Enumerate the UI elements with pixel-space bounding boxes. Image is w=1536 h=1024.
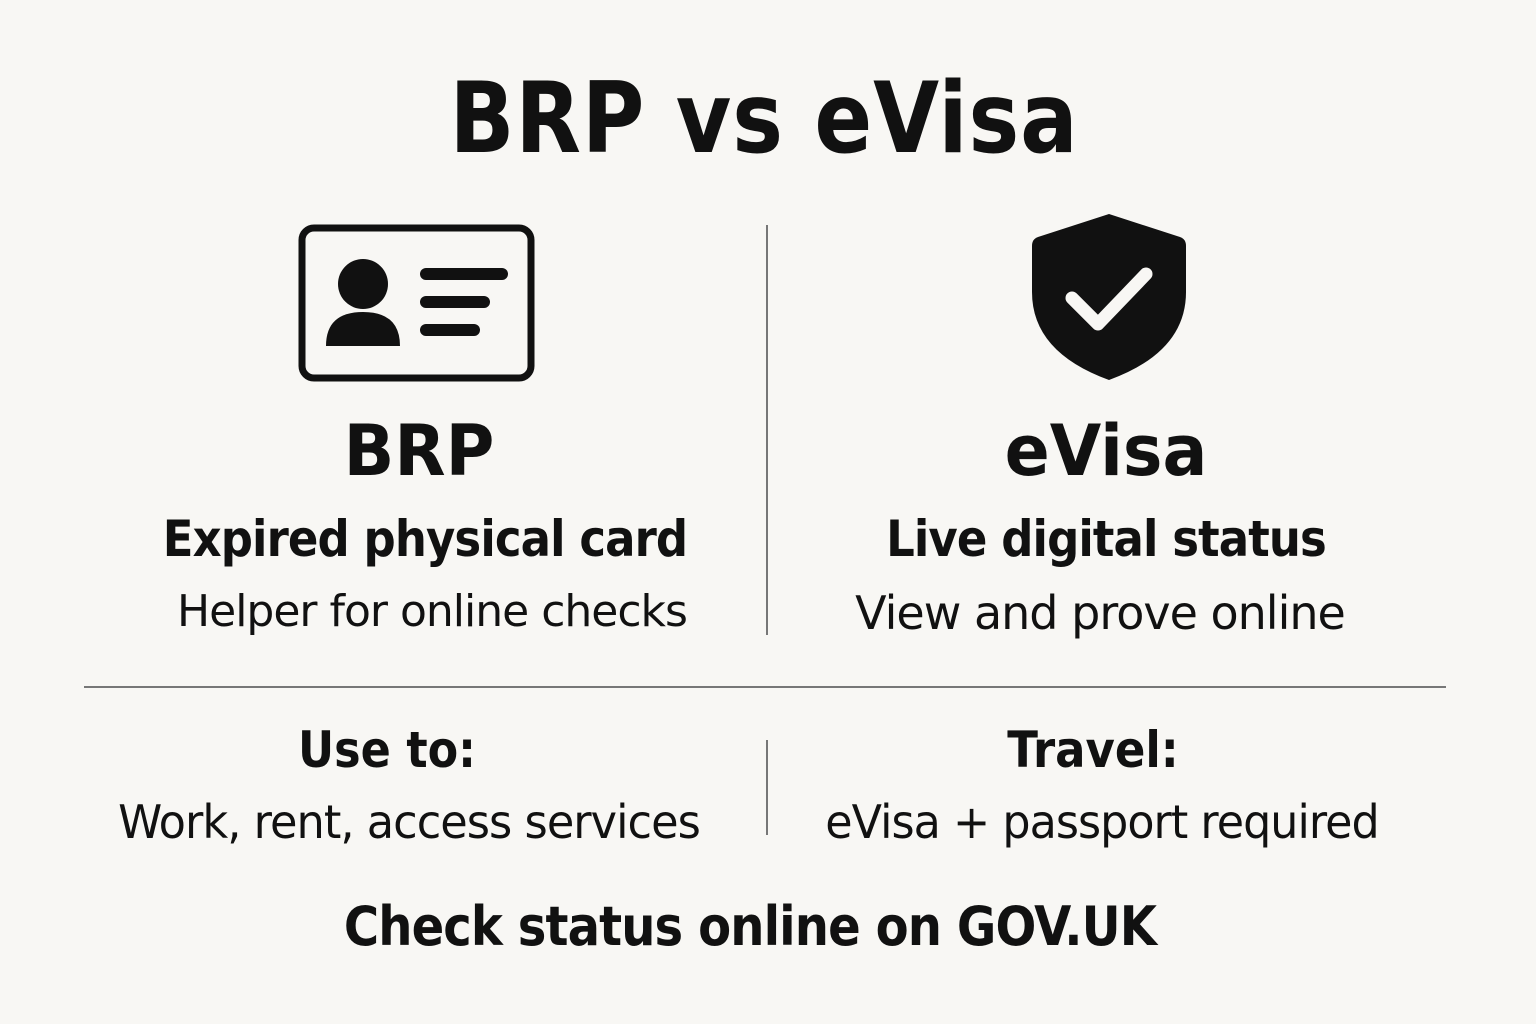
panel: eVisa xyxy=(855,214,1345,640)
icon: id card xyxy=(298,224,534,382)
footer: Check status online on GOV.UK xyxy=(344,895,1156,958)
icon: shield check xyxy=(1032,214,1186,380)
vertical divider bottom xyxy=(766,740,768,835)
heading: use to: Use to: xyxy=(298,721,476,779)
text: helper: Helper for online checks xyxy=(177,586,687,637)
block: travel xyxy=(825,721,1379,849)
heading: eVisa: eVisa xyxy=(1005,410,1207,492)
text: expired card: Expired physical card xyxy=(163,510,687,568)
vertical divider top xyxy=(766,225,768,635)
text: uses: Work, rent, access services xyxy=(118,795,700,849)
heading: travel: Travel: xyxy=(1007,721,1179,779)
text: travel requirement: eVisa + passport required xyxy=(825,795,1379,849)
title: BRP vs eVisa xyxy=(449,62,1079,176)
text: live status: Live digital status xyxy=(886,510,1326,568)
text: view and prove: View and prove online xyxy=(855,586,1345,640)
block: use to xyxy=(118,721,700,849)
horizontal divider xyxy=(84,686,1446,688)
heading: BRP: BRP xyxy=(344,410,494,492)
panel: BRP xyxy=(163,224,687,637)
